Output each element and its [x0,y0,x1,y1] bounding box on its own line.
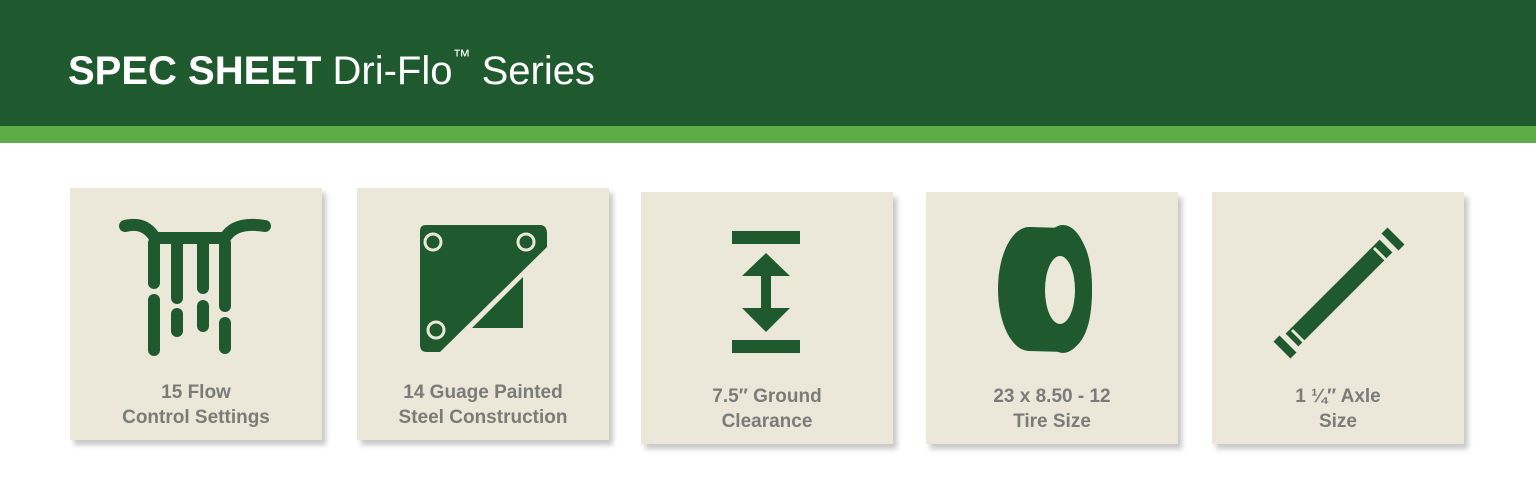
card: ground clearance: Clearance [722,411,812,432]
card: flow control: 15 Flow [161,382,231,403]
card: axle: Size [1319,411,1357,432]
card: ground clearance: 7.5″ Ground [712,386,822,407]
header band [0,0,1536,126]
card: tire: 23 x 8.50 - 12 [993,386,1111,407]
card: flow control [70,188,322,440]
card: flow control: Control Settings [122,407,270,428]
card: tire [926,192,1178,444]
card: axle [1212,192,1464,444]
title: SPEC SHEET Dri-Flo™ Series [68,46,595,93]
card: ground clearance [641,192,893,444]
card: steel: 14 Guage Painted [403,382,563,403]
card: steel [357,188,609,440]
card: steel: Steel Construction [399,407,567,428]
card: axle: 1 ¼″ Axle [1295,386,1381,407]
card: tire: Tire Size [1013,411,1091,432]
